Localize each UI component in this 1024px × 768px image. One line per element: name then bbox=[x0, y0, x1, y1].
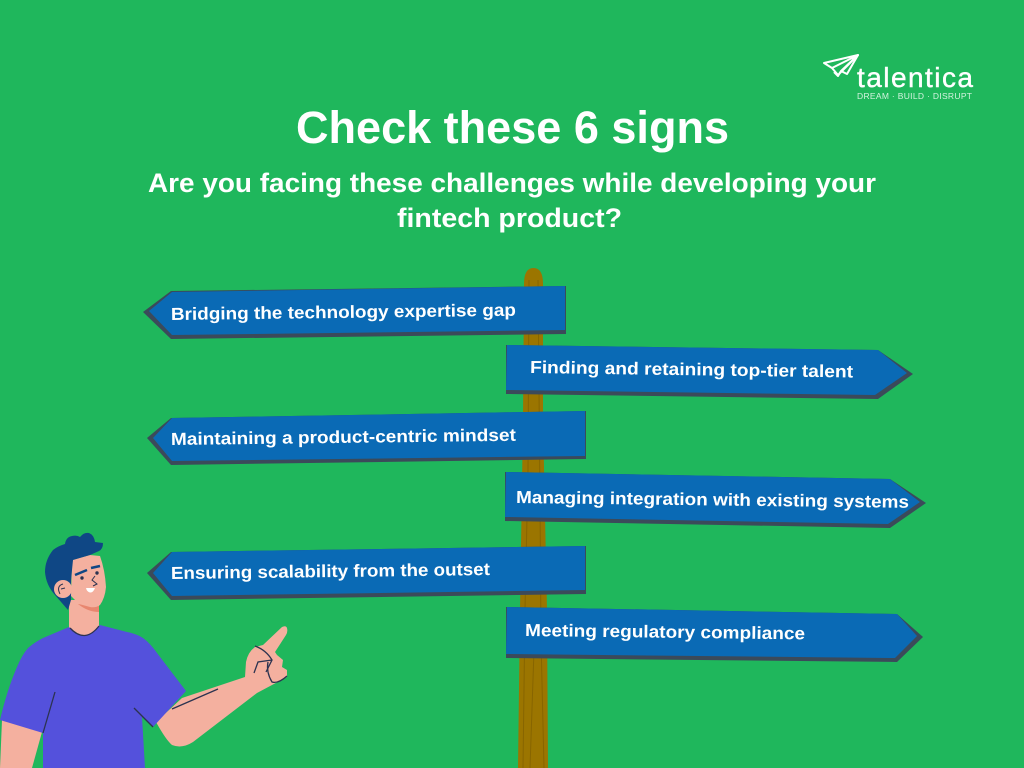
eyes bbox=[80, 571, 99, 580]
sign 6: right arrow: Meeting regulatory compliance bbox=[525, 620, 805, 643]
subtitle bbox=[148, 168, 876, 233]
nose bbox=[92, 576, 97, 586]
ear bbox=[54, 580, 72, 598]
sign 4: right arrow: Managing integration with existing systems bbox=[516, 487, 909, 512]
face bbox=[71, 555, 106, 607]
character: man pointing bbox=[0, 533, 287, 768]
ear detail bbox=[59, 584, 65, 594]
brows bbox=[75, 566, 100, 575]
subtitle: fintech product? bbox=[397, 203, 622, 233]
sign 1: left arrow: Bridging the technology expertise gap bbox=[171, 300, 516, 324]
logo tagline: DREAM · BUILD · DISRUPT bbox=[857, 91, 972, 101]
icon: paper plane bbox=[824, 55, 858, 76]
sign 6: right arrow bbox=[506, 607, 923, 662]
sign 3: left arrow: Maintaining a product-centric mindset bbox=[171, 425, 516, 449]
hair bbox=[45, 533, 103, 610]
signpost pole bbox=[518, 268, 548, 768]
logo wordmark: talentica bbox=[857, 62, 973, 93]
sign 2: right arrow: Finding and retaining top-tier talent bbox=[530, 357, 853, 382]
sign 3: left arrow bbox=[147, 411, 586, 465]
smile bbox=[86, 588, 95, 593]
sign 1: left arrow bbox=[143, 286, 566, 339]
shirt bbox=[0, 625, 186, 768]
subtitle: Are you facing these challenges while developing your bbox=[148, 168, 876, 198]
logo: talentica bbox=[824, 55, 973, 101]
sign 2: right arrow bbox=[506, 345, 913, 399]
sign 4: right arrow bbox=[505, 472, 926, 528]
garment and hand lines bbox=[43, 626, 287, 733]
sign 5: left arrow bbox=[147, 546, 586, 600]
neck bbox=[69, 600, 99, 636]
title: Check these 6 signs bbox=[296, 102, 729, 153]
sign 5: left arrow: Ensuring scalability from the outset bbox=[171, 559, 490, 583]
neck shadow bbox=[78, 604, 99, 612]
left arm bbox=[0, 720, 42, 768]
right arm and hand bbox=[156, 626, 287, 746]
